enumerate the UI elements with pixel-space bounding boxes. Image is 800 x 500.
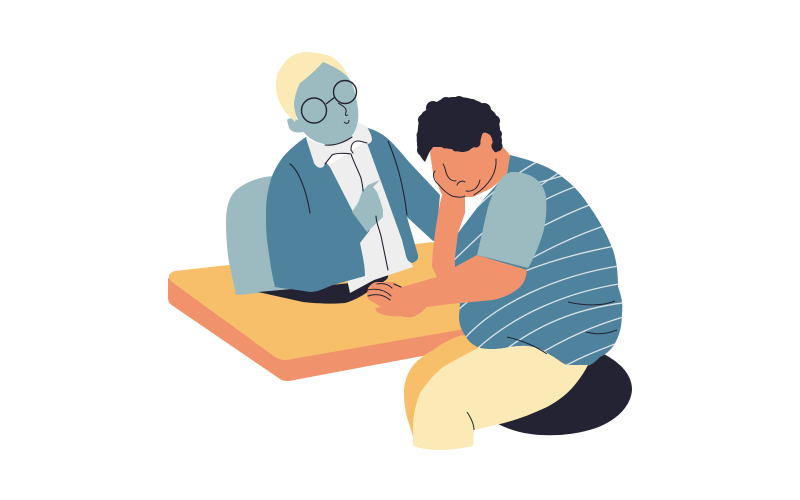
table top (169, 242, 470, 360)
trouser fold lines (467, 337, 547, 430)
sleeve (477, 172, 546, 268)
table edge (168, 278, 470, 381)
dark trousers (258, 271, 388, 304)
collar (306, 122, 372, 168)
hair (416, 96, 502, 162)
shirt stripes (452, 160, 630, 366)
chair (226, 176, 300, 295)
person left: counsellor (226, 52, 440, 304)
left jacket side (266, 137, 370, 292)
finger lines (367, 284, 401, 300)
face lines (434, 159, 496, 197)
shirt fold lines (568, 301, 617, 334)
right jacket side (365, 127, 440, 263)
trousers (413, 346, 588, 450)
nose and mouth (338, 103, 349, 123)
neck and arm (367, 128, 527, 317)
table (168, 242, 470, 381)
hair (276, 52, 348, 122)
ear (287, 118, 304, 133)
pointing hand (352, 180, 383, 232)
illustration: two people at a table (168, 52, 632, 450)
glasses (302, 80, 356, 123)
shirt (330, 140, 413, 293)
head (294, 62, 358, 145)
person right: distressed man (367, 96, 630, 450)
back leg (404, 335, 490, 437)
striped shirt (455, 155, 622, 366)
cuff line and jacket lines (290, 137, 407, 270)
cushion (498, 352, 632, 435)
